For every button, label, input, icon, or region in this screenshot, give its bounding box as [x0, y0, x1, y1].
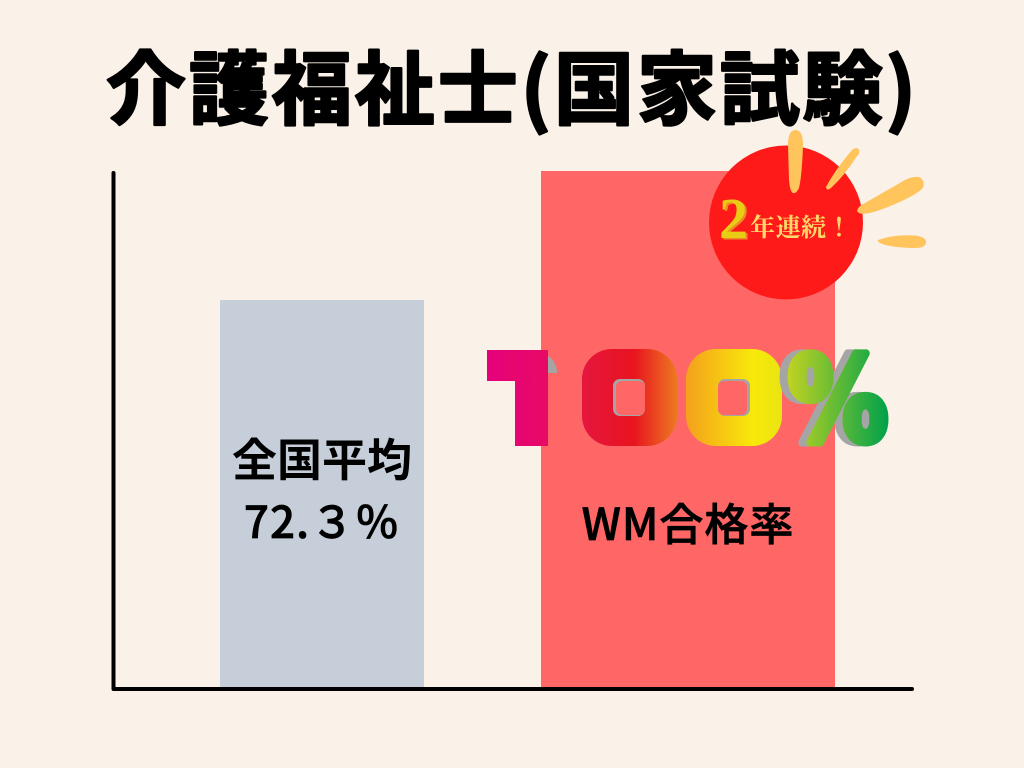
badge text: 年連続！ [750, 213, 852, 242]
digit 1 [487, 350, 557, 446]
infographic canvas [106, 48, 926, 691]
big number: 100% [487, 349, 888, 446]
label: national average: 全国平均 [232, 424, 412, 489]
digit 1: 1 [487, 336, 576, 465]
badge text [719, 186, 852, 252]
percent sign: % [780, 331, 880, 469]
badge text: 2 [719, 186, 748, 251]
digit 0: 0 [591, 342, 668, 459]
chart axes [114, 173, 912, 689]
digit 0: 0 [696, 342, 772, 459]
title: 介護福祉士(国家試験) [106, 26, 916, 142]
burst lines [788, 130, 926, 248]
percent sign: % [788, 331, 888, 469]
bar: national average [220, 300, 424, 689]
label: WM pass rate: WM合格率 [582, 489, 794, 553]
bar: WM pass rate [541, 171, 835, 689]
label: national average: 72.３％ [244, 487, 400, 551]
badge text: 2 [721, 188, 750, 252]
badge: red circle [709, 146, 863, 300]
label: national average [232, 424, 412, 551]
